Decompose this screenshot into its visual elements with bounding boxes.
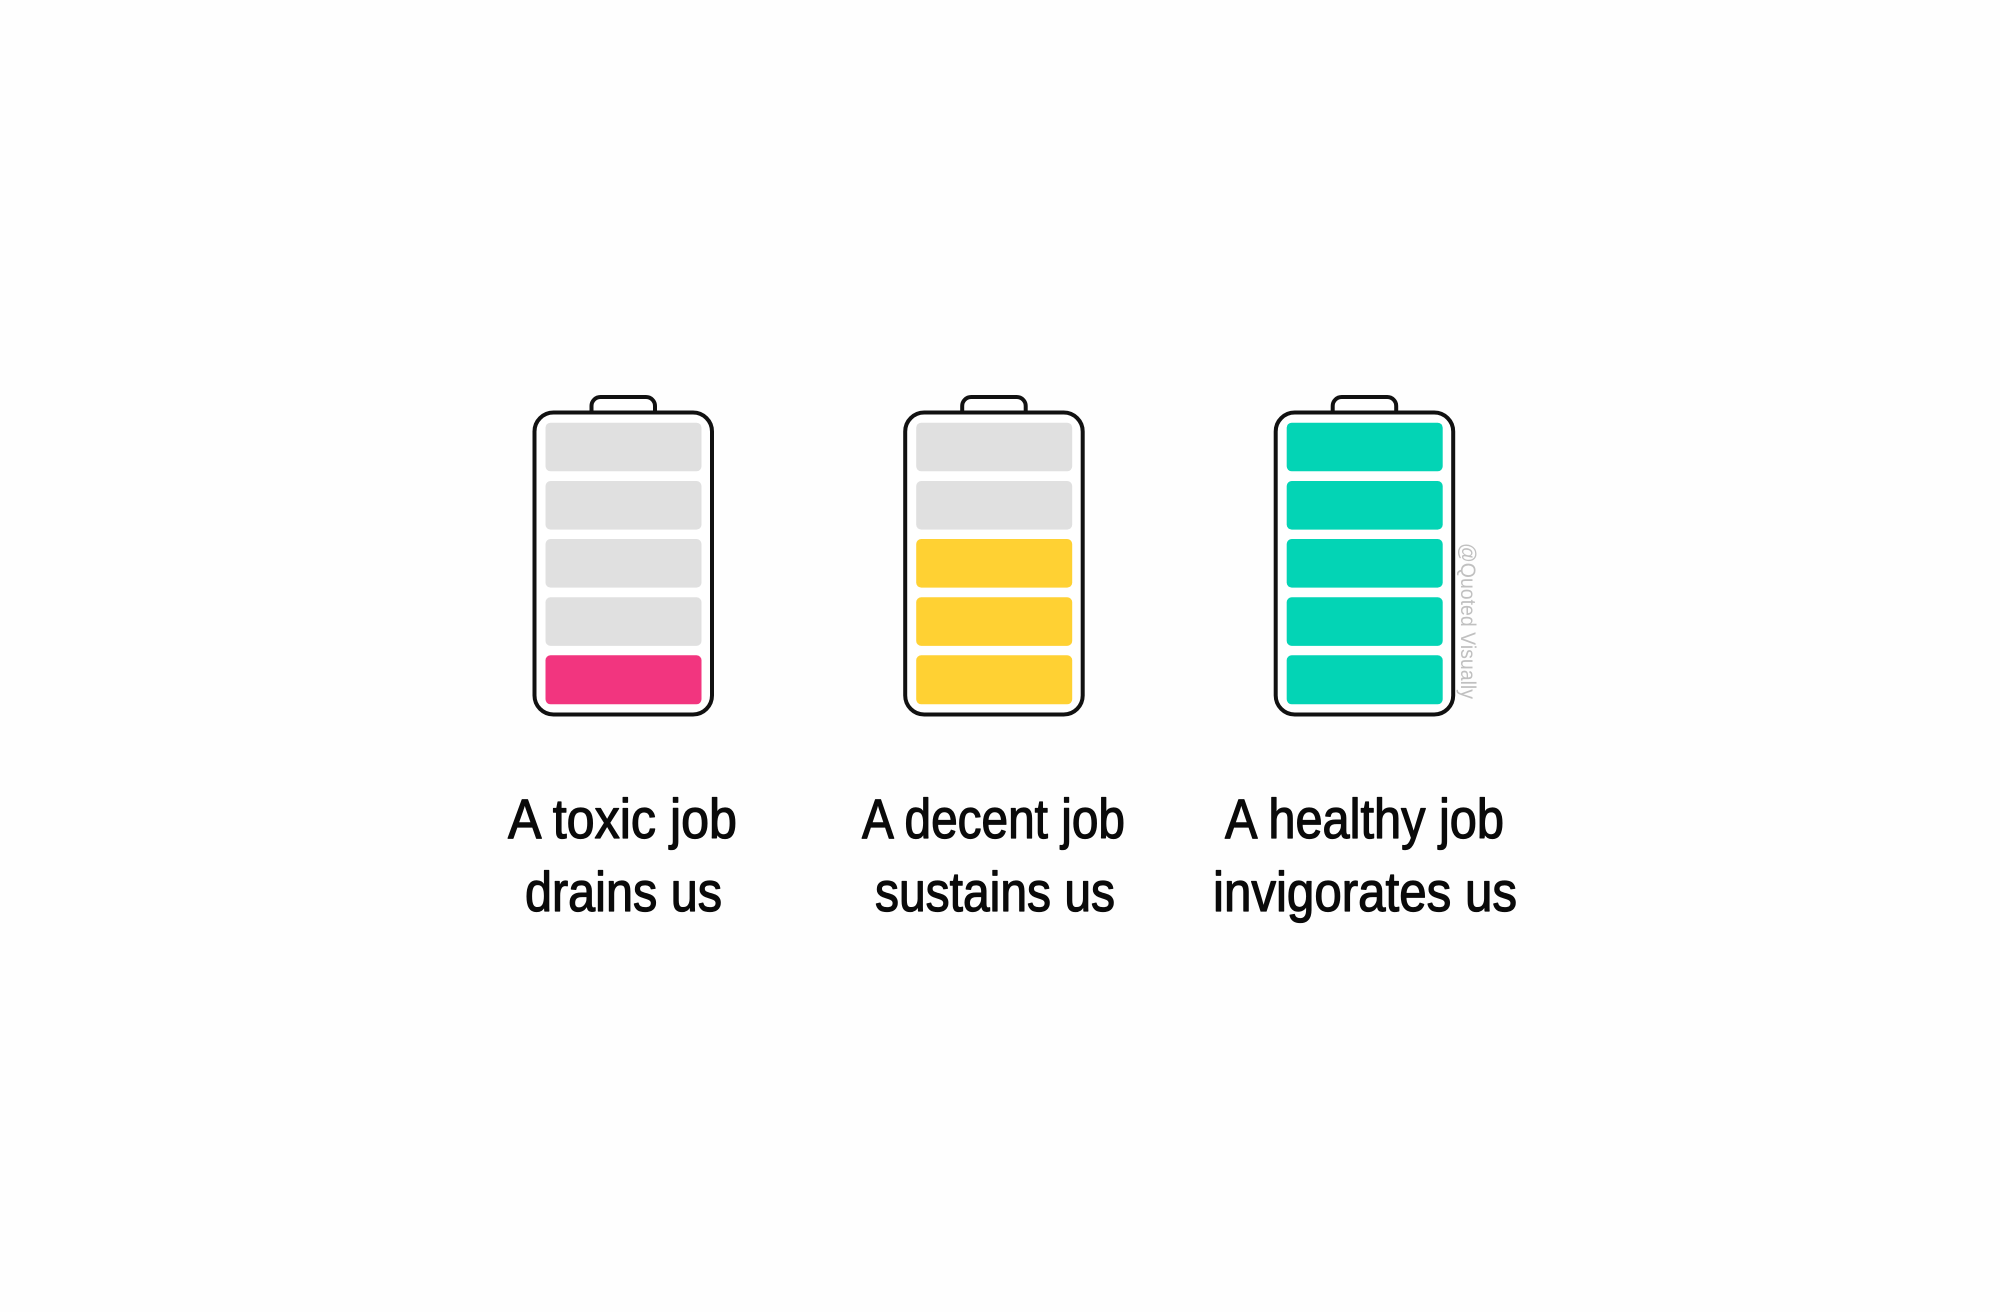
caption: healthy job: invigorates us — [1213, 860, 1517, 923]
icon: battery one bar pink — [534, 397, 712, 714]
caption: decent job: sustains us — [875, 860, 1115, 923]
caption: toxic job — [508, 787, 737, 923]
icon: battery five bars teal — [1276, 397, 1453, 714]
caption: decent job: A decent job — [862, 787, 1125, 850]
panel: toxic job — [508, 397, 737, 923]
watermark: @Quoted Visually — [1456, 543, 1479, 699]
caption: healthy job — [1213, 787, 1517, 923]
panel: decent job — [862, 397, 1125, 923]
panel: healthy job — [1213, 397, 1517, 923]
caption: healthy job: A healthy job — [1225, 787, 1504, 850]
icon: battery three bars yellow — [905, 397, 1083, 714]
caption: toxic job: A toxic job — [508, 787, 737, 850]
caption: decent job — [862, 787, 1125, 923]
caption: toxic job: drains us — [525, 860, 722, 923]
